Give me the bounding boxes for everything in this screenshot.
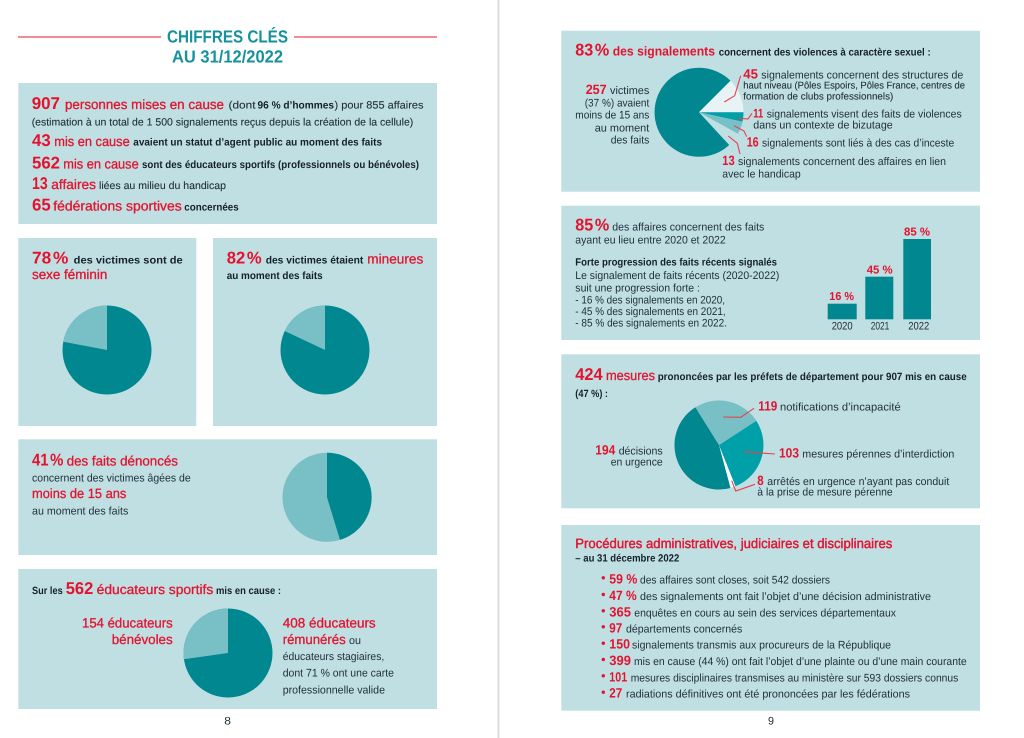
item: 150: 150 bbox=[609, 637, 630, 652]
figure: 907 persons: (dont bbox=[228, 100, 256, 112]
leader lines bbox=[724, 76, 752, 154]
bar 2022 bbox=[903, 226, 931, 332]
heading: 424 measures bbox=[575, 365, 967, 400]
heading: 424 measures: (47 %) : bbox=[575, 388, 608, 400]
heading: 78%: 78 % bbox=[32, 248, 68, 267]
figure: 562 sports educators: 562 bbox=[32, 153, 60, 172]
bar 2020: 2020 bbox=[832, 320, 853, 332]
heading: 82%: des victimes étaient bbox=[266, 254, 364, 266]
label: 257 victims: moins de 15 ans bbox=[575, 110, 650, 122]
label: 257 victims: au moment bbox=[595, 122, 649, 134]
title bbox=[18, 27, 437, 66]
panel: 562 educators bbox=[18, 569, 437, 709]
panel: 85% recent facts bbox=[561, 206, 980, 340]
heading: 78%: des victimes sont de bbox=[74, 254, 183, 266]
figure: 43 public agents: mis en cause bbox=[54, 134, 130, 149]
text block: 41% bbox=[32, 450, 191, 518]
item: 101: 101 bbox=[609, 669, 628, 684]
panel: 424 measures bbox=[561, 354, 980, 508]
panel: 83% sexual violence bbox=[561, 31, 980, 192]
item: 365 bbox=[602, 604, 896, 619]
figure: 43 public agents bbox=[32, 131, 382, 150]
label: 408 paid: ou bbox=[349, 635, 361, 647]
text block: 41%: des faits dénoncés bbox=[67, 453, 178, 468]
label: 103 measures: 103 bbox=[779, 446, 799, 461]
heading: 562 educators: éducateurs sportifs bbox=[97, 582, 214, 597]
bar 2022: 2022 bbox=[908, 320, 929, 332]
figure: 65 federations: concernées bbox=[184, 202, 239, 214]
pie chart: educators bbox=[183, 608, 272, 698]
text block: 41%: 41 % bbox=[32, 450, 63, 469]
figure: 13 disability cases: affaires bbox=[51, 177, 96, 192]
label: 45 high level: formation de clubs professionnels) bbox=[743, 91, 893, 102]
label: 8 orders bbox=[757, 473, 949, 498]
heading: 82% bbox=[227, 248, 424, 282]
label: 119 notifications bbox=[758, 398, 901, 413]
figure: 907 persons: 96 % d’hommes bbox=[258, 100, 334, 112]
heading: procedures: Procédures administratives, judiciaires et disciplinaires bbox=[575, 536, 893, 551]
label: 103 measures: mesures pérennes d’interdiction bbox=[802, 449, 954, 461]
item: 47%: des signalements ont fait l’objet d’une décision administrative bbox=[640, 591, 931, 603]
heading: 78%: sexe féminin bbox=[32, 267, 107, 282]
figure: 907 persons: ) pour 855 affaires bbox=[334, 100, 424, 112]
heading: 562 educators bbox=[32, 579, 281, 598]
heading: 562 educators: 562 bbox=[66, 579, 93, 598]
item: 150: signalements transmis aux procureurs de la République bbox=[632, 640, 891, 652]
figure: 562 sports educators: mis en cause bbox=[63, 156, 139, 171]
item: 101: mesures disciplinaires transmises au ministère sur 593 dossiers connus bbox=[631, 672, 959, 684]
pie chart: 78% bbox=[62, 306, 152, 394]
label: 194 decisions bbox=[595, 442, 663, 469]
label: 45 high level bbox=[743, 66, 966, 102]
item: 365: enquêtes en cours au sein des services départementaux bbox=[634, 607, 896, 619]
label: 408 paid: rémunérés bbox=[283, 632, 346, 647]
heading: 424 measures: 424 bbox=[575, 365, 603, 384]
label: 45 high level: signalements concernent des structures de bbox=[761, 69, 963, 81]
label: 13 disability: signalements concernent des affaires en lien bbox=[738, 156, 946, 168]
heading: 83%: concernent des violences à caractère sexuel : bbox=[719, 47, 931, 59]
label: 257 victims: (37 %) avaient bbox=[585, 97, 649, 109]
heading: 562 educators: Sur les bbox=[32, 585, 63, 597]
bar 2022: 85 % bbox=[904, 226, 930, 238]
label: 257 victims: victimes bbox=[610, 85, 650, 97]
bar 2021: 2021 bbox=[871, 320, 889, 332]
figure: 562 sports educators: sont des éducateurs sportifs (professionnels ou bénévoles) bbox=[142, 159, 419, 171]
label: 408 paid: éducateurs stagiaires, bbox=[283, 651, 384, 663]
label: 194 decisions: décisions bbox=[619, 445, 663, 457]
figure: 65 federations bbox=[32, 196, 239, 215]
item: 97: 97 bbox=[609, 620, 622, 635]
label: 257 victims: 257 bbox=[586, 82, 607, 97]
label: 11 hazing bbox=[753, 107, 962, 131]
label: 408 paid bbox=[283, 615, 394, 696]
text block: 85%: 85 % bbox=[575, 216, 609, 235]
panel: 82% minors bbox=[213, 238, 437, 426]
list: procedure figures bbox=[602, 571, 967, 701]
item: 97 bbox=[602, 620, 743, 635]
heading: 82%: au moment des faits bbox=[227, 270, 323, 282]
figure: 13 disability cases: 13 bbox=[32, 174, 48, 193]
bar 2021 bbox=[865, 264, 893, 332]
text block: 41%: moins de 15 ans bbox=[32, 486, 127, 501]
bar chart bbox=[828, 226, 931, 332]
item: 59%: 59 % bbox=[609, 571, 637, 586]
item: 47%: 47 % bbox=[609, 588, 637, 603]
item: 150 bbox=[602, 637, 891, 652]
text block: progression: - 16 % des signalements en 2020, bbox=[575, 294, 725, 306]
page number 8: 8 bbox=[224, 716, 231, 728]
heading: 83%: 83 % bbox=[575, 41, 609, 60]
label: 45 high level: 45 bbox=[743, 66, 758, 81]
text block: 85% bbox=[575, 216, 765, 246]
label: 11 hazing: dans un contexte de bizutage bbox=[753, 119, 893, 131]
text block: 41%: concernent des victimes âgées de bbox=[32, 472, 191, 484]
pie chart: reports bbox=[655, 68, 744, 157]
item: 59% bbox=[602, 571, 830, 586]
panel: 78% female victims bbox=[18, 238, 196, 426]
item: 399: 399 bbox=[609, 653, 631, 668]
title: CHIFFRES CLÉS bbox=[167, 27, 288, 47]
label: 11 hazing: 11 bbox=[753, 107, 763, 121]
item: 59%: des affaires sont closes, soit 542 dossiers bbox=[640, 574, 830, 586]
item: 27: 27 bbox=[609, 686, 622, 701]
label: 154 volunteers: 154 éducateurs bbox=[82, 615, 173, 630]
panel: 41% under 15 bbox=[18, 439, 437, 555]
title: AU 31/12/2022 bbox=[172, 46, 283, 66]
text block: progression: Forte progression des faits récents signalés bbox=[575, 256, 777, 268]
label: 45 high level: haut niveau (Pôles Espoirs, Pôles France, centres de bbox=[743, 80, 966, 91]
label: 154 volunteers bbox=[82, 615, 173, 647]
panel: key figures bbox=[18, 83, 437, 224]
item: 47% bbox=[602, 588, 931, 603]
leader lines bbox=[723, 408, 775, 491]
item: 399: mis en cause (44 %) ont fait l’objet d’une plainte ou d’une main courante bbox=[634, 656, 967, 668]
text block: progression bbox=[575, 256, 779, 330]
label: 103 measures bbox=[779, 446, 954, 461]
heading: 83% bbox=[575, 41, 931, 60]
figure: 907 persons: (estimation à un total de 1 500 signalements reçus depuis la création de la cellule) bbox=[32, 116, 413, 128]
label: 408 paid: professionnelle valide bbox=[283, 684, 385, 696]
label: 408 paid: 408 éducateurs bbox=[283, 615, 376, 630]
text block: progression: Le signalement de faits récents (2020-2022) bbox=[575, 270, 779, 282]
figure: 907 persons bbox=[32, 94, 423, 128]
figure: 907 persons: 907 bbox=[32, 94, 60, 113]
pie chart: 41% bbox=[282, 453, 372, 542]
figure: 65 federations: 65 bbox=[32, 196, 51, 215]
text block: 41%: au moment des faits bbox=[32, 506, 129, 518]
heading: 82%: 82 % bbox=[227, 248, 262, 267]
label: 408 paid: dont 71 % ont une carte bbox=[283, 668, 394, 680]
figure: 43 public agents: 43 bbox=[32, 131, 51, 150]
label: 257 victims bbox=[575, 82, 650, 147]
text block: progression: - 85 % des signalements en 2022. bbox=[575, 318, 727, 330]
label: 119 notifications: 119 bbox=[758, 398, 777, 413]
figure: 907 persons: personnes mises en cause bbox=[65, 97, 224, 112]
heading: procedures: – au 31 décembre 2022 bbox=[575, 553, 679, 565]
text block: progression: suit une progression forte : bbox=[575, 283, 700, 295]
figure: 65 federations: fédérations sportives bbox=[53, 199, 182, 214]
label: 16 incest: 16 bbox=[747, 135, 759, 150]
label: 194 decisions: en urgence bbox=[611, 457, 663, 469]
bar 2020: 16 % bbox=[829, 291, 854, 303]
heading: 83%: des signalements bbox=[613, 44, 715, 59]
label: 13 disability: 13 bbox=[722, 153, 735, 168]
label: 16 incest: signalements sont liés à des cas d’inceste bbox=[762, 138, 954, 150]
label: 8 orders: 8 bbox=[757, 473, 764, 488]
label: 119 notifications: notifications d’incapacité bbox=[780, 401, 901, 413]
heading: 78% bbox=[32, 248, 183, 282]
figure: 43 public agents: avaient un statut d’agent public au moment des faits bbox=[133, 137, 382, 149]
text block: 85%: ayant eu lieu entre 2020 et 2022 bbox=[575, 234, 726, 246]
item: 97: départements concernés bbox=[626, 623, 743, 635]
figure: 13 disability cases bbox=[32, 174, 226, 193]
item: 27: radiations définitives ont été prononcées par les fédérations bbox=[626, 689, 910, 701]
heading: 424 measures: prononcées par les préfets de département pour 907 mis en cause bbox=[658, 371, 967, 383]
bar 2021: 45 % bbox=[867, 264, 893, 276]
page number 9: 9 bbox=[768, 715, 774, 727]
heading: 562 educators: mis en cause : bbox=[216, 585, 281, 597]
bar 2020 bbox=[828, 291, 857, 332]
label: 194 decisions: 194 bbox=[595, 442, 616, 457]
heading: 82%: mineures bbox=[367, 251, 424, 266]
label: 11 hazing: signalements visent des faits de violences bbox=[767, 109, 962, 121]
label: 257 victims: des faits bbox=[611, 135, 650, 147]
panel: procedures bbox=[561, 525, 980, 711]
text block: progression: - 45 % des signalements en 2021, bbox=[575, 306, 726, 318]
figure: 562 sports educators bbox=[32, 153, 419, 172]
pie chart: measures bbox=[674, 401, 763, 490]
heading: procedures bbox=[575, 536, 893, 565]
item: 365: 365 bbox=[609, 604, 631, 619]
label: 13 disability: avec le handicap bbox=[722, 168, 801, 180]
heading: 424 measures: mesures bbox=[606, 368, 655, 383]
pie chart: 82% bbox=[280, 305, 370, 394]
label: 8 orders: à la prise de mesure pérenne bbox=[757, 486, 893, 498]
label: 154 volunteers: bénévoles bbox=[112, 632, 173, 647]
text block: 85%: des affaires concernent des faits bbox=[612, 222, 765, 234]
label: 13 disability bbox=[722, 153, 946, 180]
figure: 13 disability cases: liées au milieu du handicap bbox=[99, 180, 226, 192]
label: 8 orders: arrêtés en urgence n’ayant pas conduit bbox=[767, 476, 949, 488]
